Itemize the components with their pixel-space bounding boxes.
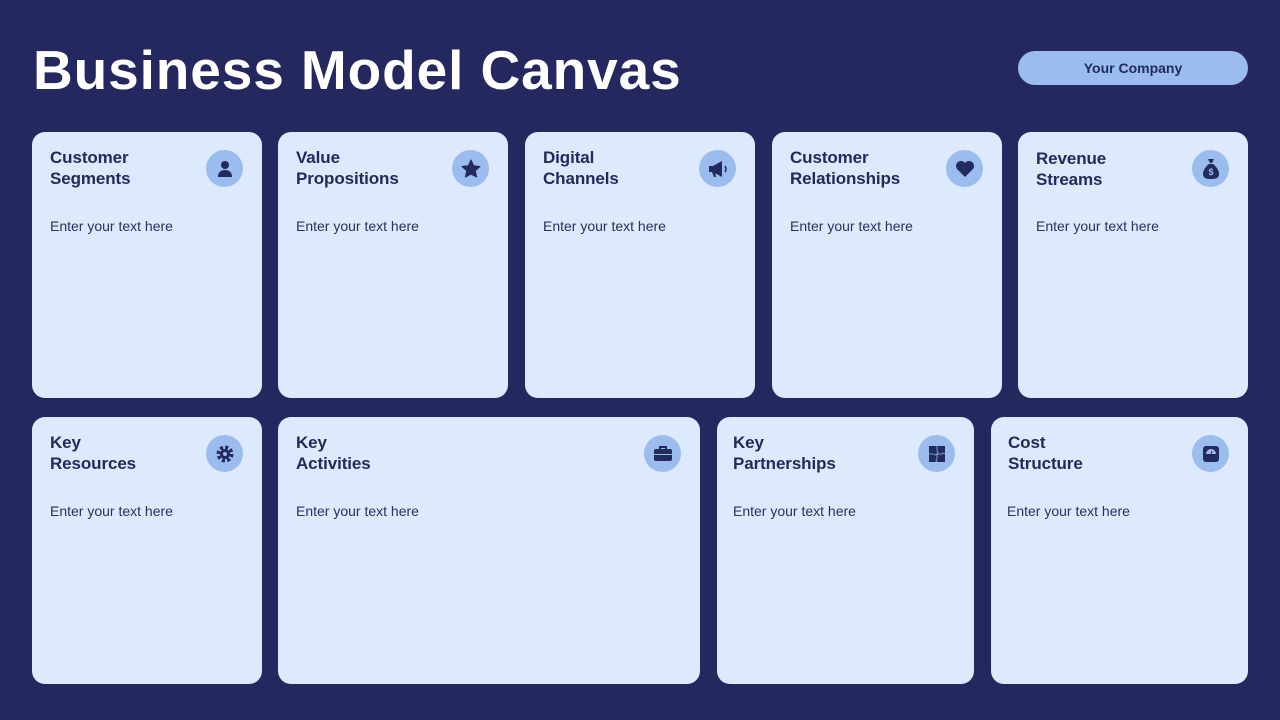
panel: cost structure: Cost xyxy=(1008,433,1045,452)
icon: heart xyxy=(946,150,983,187)
panel: key partnerships: Enter your text here xyxy=(733,503,856,519)
panel: key activities: Key xyxy=(296,433,327,452)
panel: digital channels: Digital xyxy=(543,148,594,167)
panel: customer relationships: Relationships xyxy=(790,169,900,188)
panel: key activities: Enter your text here xyxy=(296,503,419,519)
panel: key resources xyxy=(32,417,262,684)
icon: puzzle xyxy=(918,435,955,472)
panel: cost structure: Enter your text here xyxy=(1007,503,1130,519)
panel: revenue streams xyxy=(1018,132,1248,398)
panel: revenue streams: Streams xyxy=(1036,170,1102,189)
panel: digital channels: Channels xyxy=(543,169,619,188)
panel: value propositions: Propositions xyxy=(296,169,399,188)
panel: customer relationships xyxy=(772,132,1002,398)
panel: customer segments: Segments xyxy=(50,169,130,188)
panel: key resources: Resources xyxy=(50,454,136,473)
panel: customer segments: Enter your text here xyxy=(50,218,173,234)
panel: value propositions: Value xyxy=(296,148,340,167)
panel: value propositions: Enter your text here xyxy=(296,218,419,234)
panel: cost structure xyxy=(991,417,1248,684)
panel: key resources: Enter your text here xyxy=(50,503,173,519)
title: Business Model Canvas xyxy=(33,39,682,101)
panel: key partnerships xyxy=(717,417,974,684)
icon: briefcase xyxy=(644,435,681,472)
icon: person xyxy=(206,150,243,187)
panel: customer segments xyxy=(32,132,262,398)
icon: megaphone xyxy=(699,150,736,187)
panel: key resources: Key xyxy=(50,433,81,452)
panel: digital channels xyxy=(525,132,755,398)
icon: money bag xyxy=(1192,150,1229,187)
panel: key activities xyxy=(278,417,700,684)
panel: value propositions xyxy=(278,132,508,398)
icon: scale xyxy=(1192,435,1229,472)
icon: star xyxy=(452,150,489,187)
icon: money bag: $ xyxy=(1208,166,1213,176)
icon: gear xyxy=(206,435,243,472)
panel: customer relationships: Enter your text here xyxy=(790,218,913,234)
panel: revenue streams: Enter your text here xyxy=(1036,218,1159,234)
panel: key partnerships: Key xyxy=(733,433,764,452)
company pill xyxy=(1018,51,1248,85)
panel: customer segments: Customer xyxy=(50,148,129,167)
company pill: Your Company xyxy=(1084,60,1182,76)
panel: customer relationships: Customer xyxy=(790,148,869,167)
panel: key activities: Activities xyxy=(296,454,371,473)
panel: digital channels: Enter your text here xyxy=(543,218,666,234)
panel: cost structure: Structure xyxy=(1008,454,1083,473)
panel: key partnerships: Partnerships xyxy=(733,454,836,473)
panel: revenue streams: Revenue xyxy=(1036,149,1106,168)
